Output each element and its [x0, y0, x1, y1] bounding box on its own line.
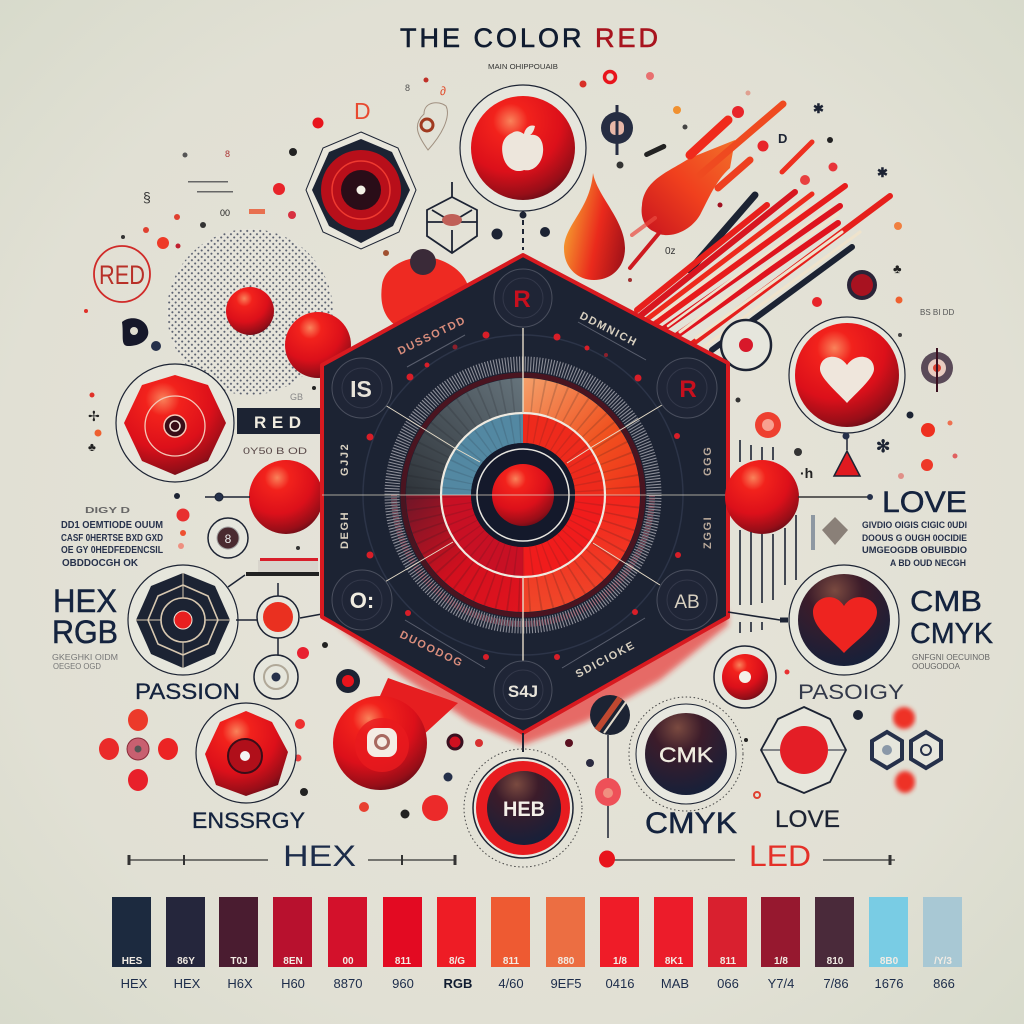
swatch labels: H60: [281, 976, 305, 991]
tick ring: [392, 364, 654, 626]
scattered marks: GB: [290, 392, 303, 402]
swatch inner codes: 1/8: [613, 956, 627, 967]
timeline left: [128, 855, 455, 865]
red blob behind panel: [381, 249, 470, 340]
scattered marks: D: [778, 131, 787, 146]
panel shadow: [322, 610, 728, 745]
label CMYK: CMYK: [910, 618, 994, 650]
subtitle: MAIN OHIPPOUAIB: [488, 64, 558, 71]
RED tag: [237, 408, 323, 434]
swatch inner codes: /Y/3: [934, 956, 952, 967]
swatch labels: 0416: [606, 976, 634, 991]
label CMB: CMB: [910, 586, 982, 618]
swatch labels: [121, 976, 955, 991]
swatch inner codes: 00: [342, 956, 354, 967]
quadrant wedges: [406, 378, 640, 612]
swatch labels: 866: [933, 976, 955, 991]
caption CMYK: OOUGODOA: [912, 662, 961, 671]
label PASSION: PASSION: [135, 679, 240, 704]
node glyphs: S4J: [508, 682, 538, 701]
swatch labels: 4/60: [498, 976, 524, 991]
panel garbled labels: GGG: [702, 446, 714, 476]
halftone circle: [167, 229, 333, 395]
text block left: DD1 OEMTIODE OUUM: [61, 520, 163, 531]
swatch labels: 9EF5: [550, 976, 582, 991]
text block left: DIGY D: [85, 506, 130, 515]
swatch labels: 1676: [875, 976, 903, 991]
panel garbled labels: GJJ2: [339, 443, 351, 476]
node glyphs: R: [513, 286, 531, 313]
label HEX: HEX: [53, 583, 117, 619]
sphere left upper: [285, 312, 351, 378]
scattered marks: ✻: [876, 437, 890, 456]
red D fragment: D: [354, 98, 371, 124]
swatch labels: HEX: [174, 976, 201, 991]
connector dark heart: [780, 618, 788, 622]
swatch inner codes: HES: [122, 956, 143, 967]
pin with striped ball: [590, 695, 630, 838]
icon: eye ring: [254, 655, 298, 699]
sphere left: [249, 460, 323, 534]
swatch labels: HEX: [121, 976, 148, 991]
scattered marks: 8: [225, 149, 230, 159]
text block right: DOOUS G OUGH 0OCIDIE: [862, 533, 967, 544]
node glyphs: IS: [350, 376, 372, 402]
scattered marks: ✱: [813, 101, 824, 116]
timeline right: [599, 850, 895, 868]
icon: dark blob: [122, 318, 161, 351]
swatch inner codes: 8EN: [283, 956, 303, 967]
swatch inner codes: 811: [503, 956, 520, 967]
label ENERGY: ENSSRGY: [192, 808, 305, 833]
scattered marks: 0z: [665, 246, 676, 257]
panel garbled labels: DEGH: [339, 511, 351, 549]
scattered marks: 00: [220, 208, 230, 218]
caption CMYK: GNFGNI OECUINOB: [912, 653, 990, 662]
connector left: [205, 493, 250, 501]
swatch labels: MAB: [661, 976, 689, 991]
diamonds cluster: [99, 709, 178, 791]
icon: big red button: [333, 696, 427, 790]
scattered marks: ♣: [893, 261, 902, 276]
icon: blood drop: [564, 173, 625, 280]
vertical hatch lines: [728, 440, 796, 633]
label LOVE small: LOVE: [775, 806, 840, 833]
scattered marks: §: [143, 189, 151, 205]
icon: orange ball: [257, 596, 299, 638]
swatch labels: 960: [392, 976, 414, 991]
label CMYK centre: CMYK: [645, 807, 737, 840]
tag caption: 0Y50 B OD: [243, 446, 308, 456]
icon: ringed dial: 8: [225, 532, 232, 546]
swatch labels: 8870: [334, 976, 362, 991]
text block right: A BD OUD NECGH: [890, 558, 966, 569]
scattered marks: [84, 72, 958, 821]
swatch inner codes: [122, 956, 952, 967]
panel garbled labels: SDICIOKE: [574, 639, 638, 681]
scattered marks: ·h: [800, 465, 813, 481]
red band to sphere: [380, 678, 458, 738]
sphere right: [725, 460, 799, 534]
scattered marks: ♣: [88, 440, 96, 454]
swatch inner codes: 810: [827, 956, 844, 967]
text block right: [862, 520, 967, 569]
swatch inner codes: 8K1: [665, 956, 684, 967]
caption RGB: GKEGHKI OIDM: [52, 653, 118, 662]
caption CMYK: [912, 653, 990, 671]
RED badge: [94, 246, 150, 302]
swatch labels: 066: [717, 976, 739, 991]
scattered marks: ✱: [877, 165, 888, 180]
icon: ornament: [921, 348, 953, 392]
caption RGB: OEGEO OGD: [53, 662, 101, 671]
text block left: CASF 0HERTSE BXD GXD: [61, 533, 163, 544]
text block right: GIVDIO OIGIS CIGIC 0UDI: [862, 520, 967, 531]
outer faint ring: [363, 335, 683, 655]
icon: spiral gem: [116, 364, 234, 482]
comet streaks: [630, 104, 812, 268]
swatch inner codes: 811: [395, 956, 412, 967]
icon: triangle marker: [834, 432, 860, 476]
rings and hub: [441, 413, 605, 577]
node glyphs: R: [679, 376, 697, 403]
swatch inner codes: 8/G: [449, 956, 465, 967]
panel garbled labels: ZGGI: [702, 516, 714, 549]
connectors target: [228, 575, 322, 656]
icon: polygon red dot: [761, 707, 846, 793]
panel arc lines: [405, 322, 646, 668]
scattered marks: ∂: [440, 84, 446, 98]
swatch inner codes: T0J: [230, 956, 248, 967]
icon: pin ornament: [601, 105, 633, 155]
panel garbled labels: DUSSOTDD: [396, 314, 468, 358]
icon: HEB button: HEB: [503, 798, 545, 821]
swatch labels: RGB: [444, 976, 472, 991]
text block left: OBDDOCGH OK: [62, 558, 139, 569]
icon: dark red dot: [847, 270, 877, 300]
icon: apple sphere: [460, 85, 586, 250]
connector love: [798, 494, 873, 500]
red diamonds right: [893, 707, 915, 793]
node glyphs: AB: [674, 592, 700, 613]
icon: CMK button: CMK: [659, 744, 713, 767]
node glyphs: [350, 286, 700, 701]
icon: CMK button: [629, 697, 743, 811]
swatch inner codes: 1/8: [774, 956, 788, 967]
panel garbled labels: DDMNICH: [578, 310, 639, 349]
icon: HEB button: [464, 733, 582, 867]
label LED: LED: [749, 840, 811, 873]
text block right: UMGEOGDB OBUIBDIO: [862, 545, 967, 556]
RED badge: RED: [99, 260, 145, 290]
caption RGB: [52, 653, 118, 671]
label HEX large: HEX: [283, 840, 356, 873]
swatch inner codes: 86Y: [177, 956, 195, 967]
icon: shield glyph: [417, 103, 447, 150]
scattered marks: ✢: [88, 408, 100, 424]
label PASOIGY: PASOIGY: [798, 681, 904, 704]
label LOVE: LOVE: [882, 486, 967, 519]
panel garbled labels: [339, 310, 714, 681]
swatch row: [112, 897, 962, 967]
scattered marks: BS BI DD: [920, 308, 954, 317]
icon: small ring button: [714, 646, 776, 708]
RED tag: RED: [254, 413, 301, 432]
spokes: [322, 328, 728, 662]
swatch inner codes: 880: [558, 956, 575, 967]
swatch labels: H6X: [227, 976, 253, 991]
node glyphs: O:: [350, 588, 374, 613]
icon: dark heart: [789, 565, 899, 675]
title: THE COLOR RED: [400, 23, 658, 53]
icon: hexagon wireframe: [427, 182, 477, 253]
halftone sphere: [226, 287, 274, 335]
icon: heart sphere: [789, 317, 905, 433]
icon: eye octagon: [306, 132, 416, 249]
icon: ringed dial: [208, 518, 248, 558]
swatch labels: Y7/4: [768, 976, 794, 991]
central hexagon panel: [322, 255, 728, 733]
node circles: [332, 269, 717, 719]
label RGB: RGB: [52, 614, 118, 650]
icon: diamond pendant: [813, 515, 848, 550]
swatch inner codes: 8B0: [880, 956, 899, 967]
text block left: OE GY 0HEDFEDENCSIL: [61, 545, 163, 556]
icon: polygon button: [196, 703, 296, 803]
red and cream stripes: [637, 186, 890, 350]
icon: hex eyes: [872, 732, 941, 768]
text block left: [61, 506, 163, 569]
icon: small ring target: [721, 320, 771, 370]
panel garbled labels: DUOODOG: [398, 629, 465, 670]
icon: target octagon: [128, 565, 238, 675]
swatch labels: 7/86: [823, 976, 849, 991]
panel small dots: [366, 332, 681, 660]
swatch inner codes: 811: [720, 956, 737, 967]
scattered marks: 8: [405, 83, 410, 93]
